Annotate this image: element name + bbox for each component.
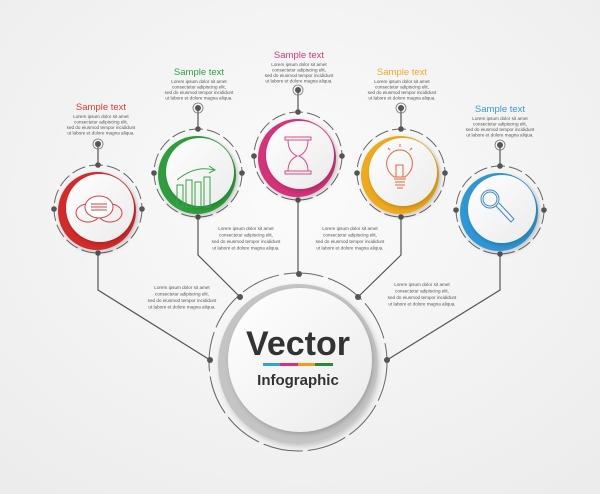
middle text blocks: ut labore et dolore magna aliqua. — [148, 304, 216, 310]
middle text blocks: sed do eiusmod tempor incididunt — [388, 295, 457, 300]
node: orange — [354, 103, 448, 220]
labels: titles and text: ut labore et dolore magna aliqua. — [67, 130, 135, 136]
labels: titles and text: ut labore et dolore magna aliqua. — [466, 132, 534, 138]
labels: titles and text: Lorem ipsum dolor sit amet — [271, 62, 327, 67]
node: red — [51, 139, 145, 256]
title: Vector Infographic: Vector — [246, 325, 350, 363]
node: green — [151, 103, 245, 220]
icon: speech bubbles — [76, 196, 122, 222]
connector lines — [98, 90, 500, 360]
labels: titles and text: consectetur adipiscing elit, — [272, 68, 326, 72]
middle text blocks: consectetur adipiscing elit, — [219, 232, 273, 238]
central circle — [207, 271, 390, 451]
labels: titles and text: consectetur adipiscing elit, — [172, 84, 226, 90]
labels: titles and text: sed do eiusmod tempor incididunt — [165, 90, 234, 95]
middle text blocks: consectetur adipiscing elit, — [395, 288, 449, 294]
labels: titles and text: Sample text — [475, 104, 525, 115]
middle text blocks: consectetur adipiscing elit, — [155, 292, 209, 296]
labels: titles and text: Sample text — [76, 102, 126, 113]
labels: titles and text: sed do eiusmod tempor incididunt — [67, 125, 136, 130]
middle text blocks: ut labore et dolore magna aliqua. — [316, 246, 384, 250]
node: pink — [251, 85, 345, 203]
middle text blocks: Lorem ipsum dolor sit amet — [322, 226, 378, 231]
labels: titles and text: ut labore et dolore magna aliqua. — [265, 78, 333, 84]
labels: titles and text: Sample text — [174, 67, 224, 78]
labels: titles and text: Sample text — [274, 50, 324, 61]
middle text blocks: Lorem ipsum dolor sit amet — [218, 226, 274, 231]
icon: hourglass — [285, 137, 311, 174]
middle text blocks: sed do eiusmod tempor incididunt — [148, 298, 217, 303]
labels: titles and text: Lorem ipsum dolor sit amet — [472, 116, 528, 121]
middle text blocks: consectetur adipiscing elit, — [323, 232, 377, 238]
icon: magnifier — [481, 190, 514, 222]
central circle: Infographic — [257, 372, 339, 389]
middle text blocks — [148, 226, 457, 310]
labels: titles and text: consectetur adipiscing elit, — [74, 120, 128, 124]
labels: titles and text: sed do eiusmod tempor incididunt — [368, 90, 437, 95]
labels: titles and text: ut labore et dolore magna aliqua. — [368, 96, 436, 100]
labels: titles and text: Sample text — [377, 67, 427, 78]
labels: titles and text: sed do eiusmod tempor incididunt — [466, 127, 535, 132]
node: blue — [453, 140, 547, 257]
icon: light bulb — [387, 144, 412, 188]
labels: titles and text: ut labore et dolore magna aliqua. — [165, 96, 233, 100]
labels: titles and text: Lorem ipsum dolor sit amet — [171, 79, 227, 84]
labels: titles and text: consectetur adipiscing elit, — [473, 122, 527, 126]
middle text blocks: sed do eiusmod tempor incididunt — [316, 239, 385, 244]
middle text blocks: ut labore et dolore magna aliqua. — [388, 302, 456, 306]
labels: titles and text: Lorem ipsum dolor sit amet — [374, 79, 430, 84]
labels: titles and text: consectetur adipiscing elit, — [375, 84, 429, 90]
middle text blocks: Lorem ipsum dolor sit amet — [154, 285, 210, 290]
labels: titles and text: sed do eiusmod tempor incididunt — [265, 73, 334, 78]
labels: titles and text — [67, 50, 535, 138]
labels: titles and text: Lorem ipsum dolor sit amet — [73, 114, 129, 119]
middle text blocks: sed do eiusmod tempor incididunt — [212, 239, 281, 244]
middle text blocks: ut labore et dolore magna aliqua. — [212, 246, 280, 250]
middle text blocks: Lorem ipsum dolor sit amet — [394, 282, 450, 287]
icon: bar chart — [177, 166, 215, 207]
